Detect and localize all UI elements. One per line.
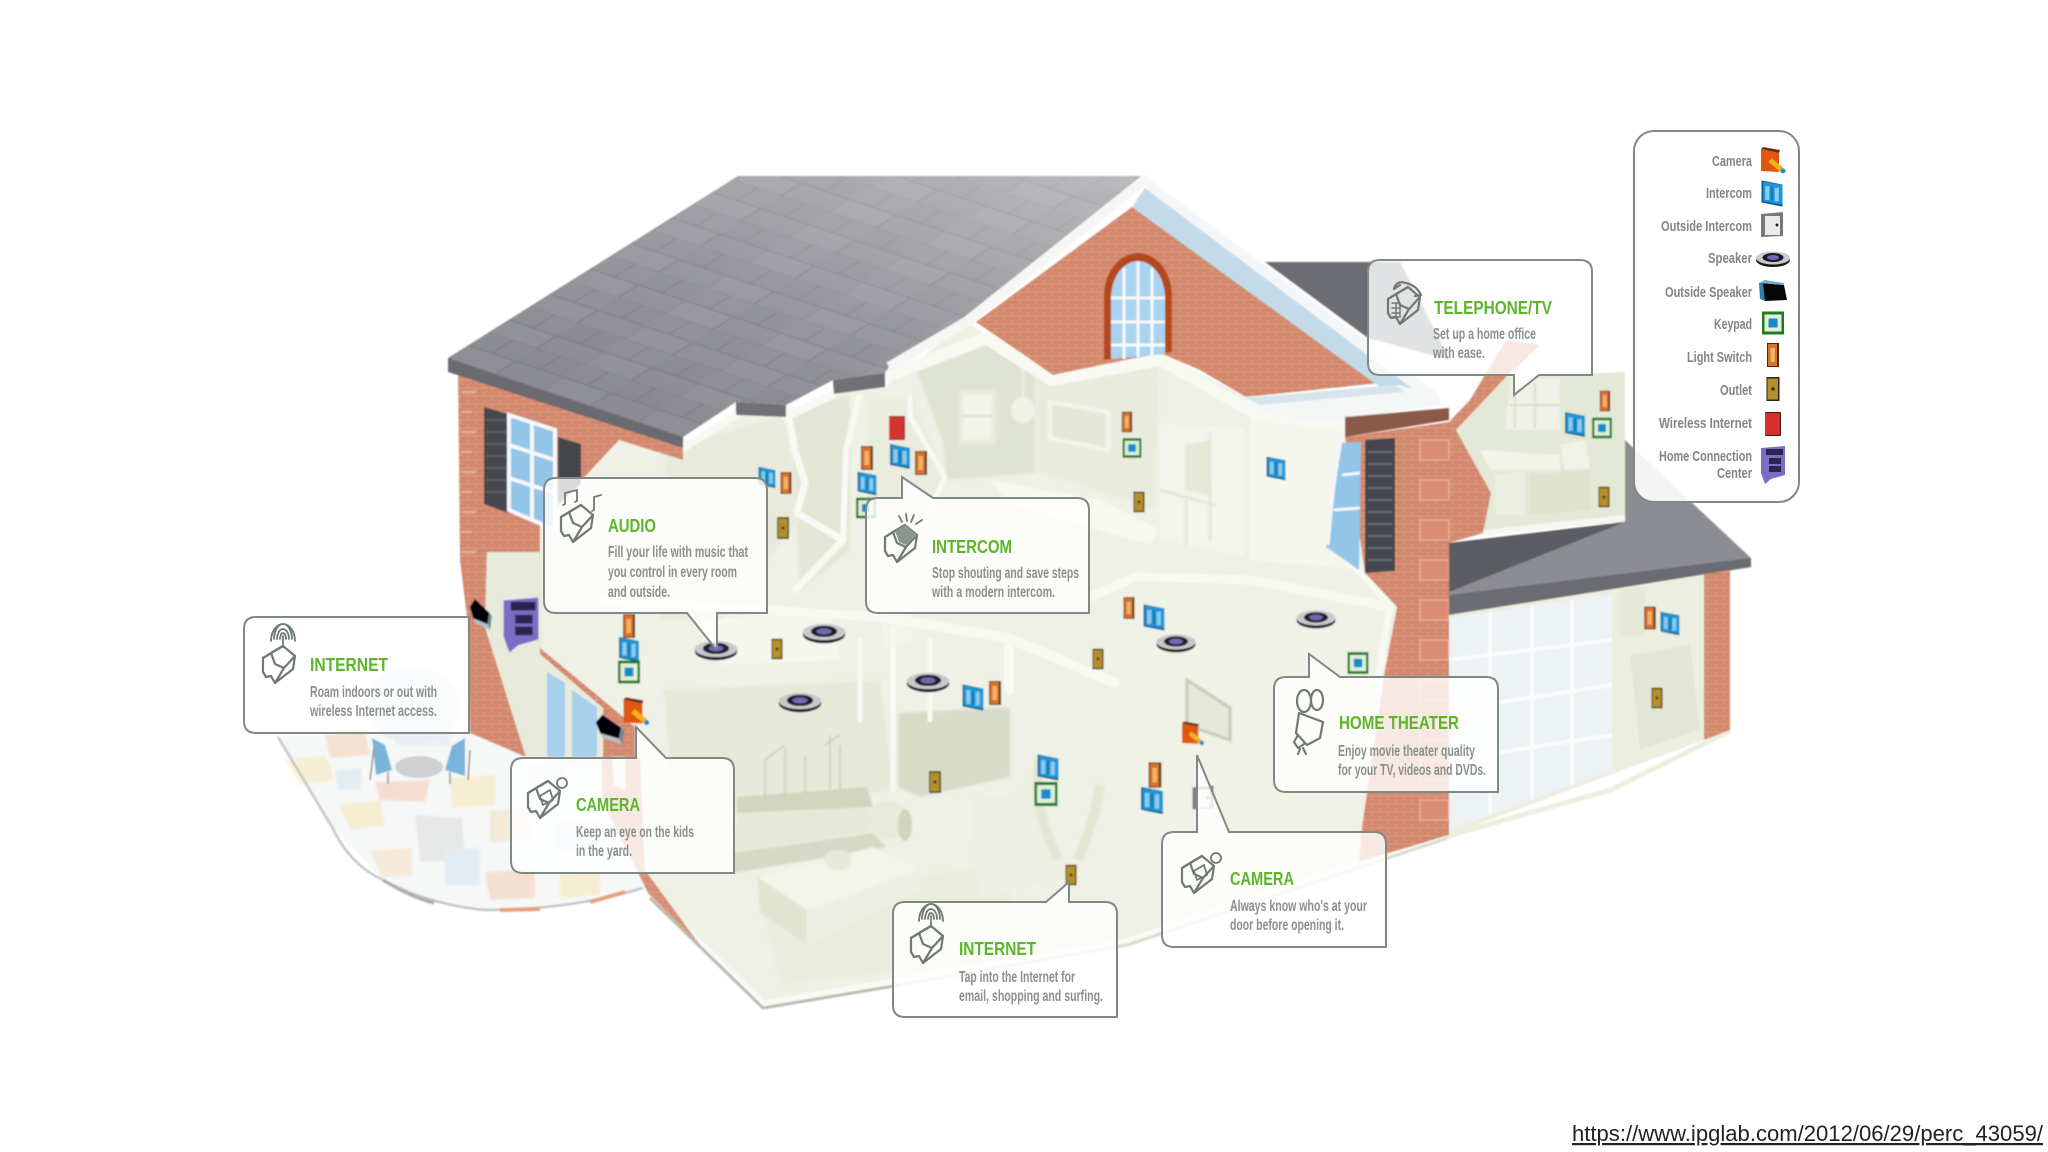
callout: internet surfing xyxy=(893,882,1117,1017)
illustration: cutaway house xyxy=(278,176,1751,1008)
callout: intercom: Stop shouting and save steps xyxy=(932,565,1079,582)
floor edge xyxy=(648,731,1730,1008)
callout: camera yard: CAMERA xyxy=(576,795,640,815)
main roof xyxy=(448,176,1147,448)
legend item: light switch: Light Switch xyxy=(1687,350,1752,366)
shaded wall zones xyxy=(660,345,1360,985)
legend item: home connection center: Home Connection xyxy=(1659,449,1752,465)
callout: telephone and TV: TELEPHONE/TV xyxy=(1434,298,1552,318)
legend item: home connection center xyxy=(1659,446,1785,484)
interior cut lines xyxy=(568,338,1390,790)
left brick wall xyxy=(458,372,683,757)
legend item: speaker: Speaker xyxy=(1708,251,1752,267)
icon: camera house xyxy=(528,778,567,818)
legend item: outside speaker: Outside Speaker xyxy=(1665,285,1752,301)
lower left door and wall xyxy=(485,552,700,945)
icon: intercom house xyxy=(885,514,922,562)
legend item: outlet xyxy=(1720,377,1780,401)
devices placed in the house xyxy=(470,391,1679,885)
callout: home theater: HOME THEATER xyxy=(1339,713,1459,733)
back roof section xyxy=(1265,262,1450,360)
legend item: camera xyxy=(1712,147,1786,174)
callout: home theater: Enjoy movie theater quality xyxy=(1338,743,1475,760)
callout: internet surfing: email, shopping and surfing. xyxy=(959,988,1103,1005)
callout: audio: you control in every room xyxy=(608,564,737,581)
gable brick wall with arched window xyxy=(976,180,1440,420)
callout: camera yard: Keep an eye on the kids xyxy=(576,824,694,841)
legend item: camera: Camera xyxy=(1712,154,1753,170)
garage roof xyxy=(1449,440,1751,615)
callout: camera yard: in the yard. xyxy=(576,843,632,860)
legend item: outside intercom: Outside Intercom xyxy=(1661,219,1752,235)
callout: audio xyxy=(544,478,767,648)
legend item: light switch xyxy=(1687,343,1779,367)
callout: intercom: INTERCOM xyxy=(932,537,1012,557)
callout: home theater xyxy=(1274,654,1498,792)
legend item: wireless internet xyxy=(1659,412,1781,436)
patio with table and chairs xyxy=(278,667,643,910)
legend item: outlet: Outlet xyxy=(1720,383,1752,399)
legend item: intercom xyxy=(1706,180,1782,207)
icon: film camera house xyxy=(1294,690,1323,754)
legend xyxy=(1634,131,1799,502)
icon: wireless house xyxy=(263,624,295,683)
legend item: wireless internet: Wireless Internet xyxy=(1659,416,1752,432)
legend item: keypad: Keypad xyxy=(1714,317,1752,333)
legend item: outside intercom xyxy=(1661,212,1783,237)
icon: wireless house xyxy=(911,904,943,963)
callout: audio: Fill your life with music that xyxy=(608,544,748,561)
callout: telephone and TV: with ease. xyxy=(1432,345,1485,362)
upper floor furniture xyxy=(640,365,1244,557)
callout: telephone and TV xyxy=(1368,260,1592,395)
callout: camera door: Always know who's at your xyxy=(1230,898,1367,915)
callout: internet roaming xyxy=(244,617,469,733)
legend item: speaker xyxy=(1708,251,1790,267)
interior base xyxy=(485,322,1397,1005)
legend item: home connection center: Center xyxy=(1717,466,1752,482)
callout: camera yard xyxy=(511,727,734,873)
callout: telephone and TV: Set up a home office xyxy=(1433,326,1536,343)
icon: camera house xyxy=(1182,853,1221,893)
callout: internet surfing: INTERNET xyxy=(959,939,1036,959)
upper office xyxy=(1456,372,1625,533)
callout: camera door xyxy=(1162,755,1386,947)
garage wall and door xyxy=(1449,570,1730,835)
callout: internet roaming: Roam indoors or out with xyxy=(310,684,437,701)
legend item: keypad xyxy=(1714,312,1784,334)
left window and shutters xyxy=(484,407,581,530)
callout: internet roaming: INTERNET xyxy=(310,655,388,675)
right brick wall xyxy=(1326,340,1540,862)
lower floor furniture xyxy=(665,600,1230,945)
callout: intercom: with a modern intercom. xyxy=(931,584,1055,601)
icon: telephone house xyxy=(1388,282,1421,324)
callout: internet surfing: Tap into the Internet for xyxy=(959,969,1075,986)
callout: audio: and outside. xyxy=(608,584,670,601)
callout: audio: AUDIO xyxy=(608,516,656,536)
legend item: intercom: Intercom xyxy=(1706,186,1752,202)
icon: audio house xyxy=(561,490,601,542)
callout: internet roaming: wireless Internet access. xyxy=(309,703,437,720)
callout: camera door: CAMERA xyxy=(1230,869,1294,889)
callout: home theater: for your TV, videos and DVDs. xyxy=(1338,762,1486,779)
source link: https://www.ipglab.com/2012/06/29/perc_43059/ xyxy=(1572,1121,2044,1146)
callout: camera door: door before opening it. xyxy=(1230,917,1344,934)
left wall corner quoins xyxy=(462,392,476,552)
callout: intercom xyxy=(866,477,1089,613)
